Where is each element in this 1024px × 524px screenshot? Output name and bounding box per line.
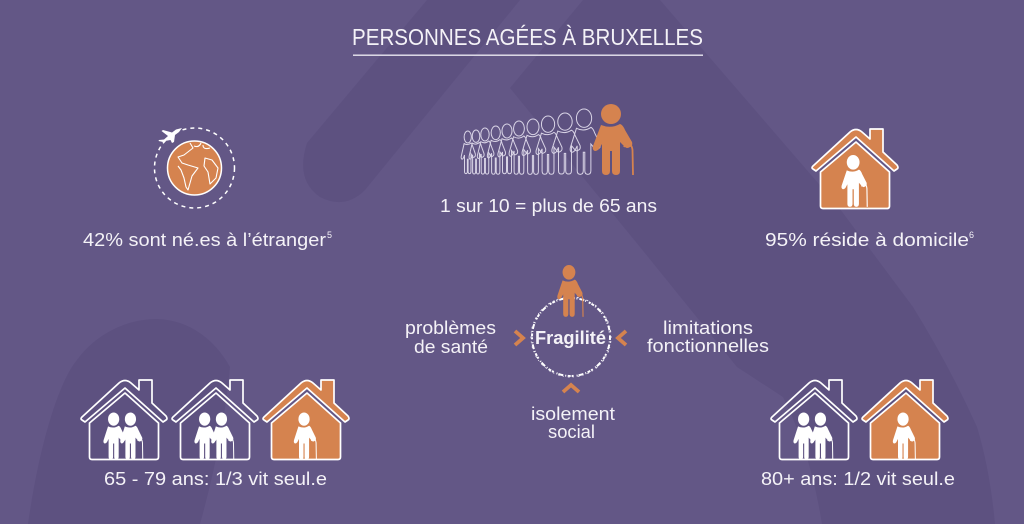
text: health problems: problèmes (405, 318, 496, 338)
text: health problems (405, 318, 496, 357)
title: PERSONNES AGÉES À BRUXELLES (352, 24, 703, 50)
text: health problems: de santé (414, 337, 488, 357)
text: functional limitations (647, 318, 769, 356)
arrow: right chevron (618, 331, 626, 345)
text: born abroad: 5 (327, 230, 332, 240)
text: 80+: 80+ ans: 1/2 vit seul.e (761, 469, 955, 489)
fragility circle: Fragilité (535, 328, 606, 348)
fragility circle (531, 297, 611, 377)
text: at home: 6 (969, 230, 974, 240)
text: functional limitations: limitations (663, 318, 753, 338)
icon: orange house with senior (812, 129, 898, 208)
text: social isolation: isolement (531, 404, 615, 424)
text: 65-79: 65 - 79 ans: 1/3 vit seul.e (104, 469, 327, 489)
text: social isolation (531, 404, 615, 442)
text: born abroad: 42% sont né.es à l’étranger (83, 230, 326, 250)
text: one in ten: 1 sur 10 = plus de 65 ans (440, 196, 657, 216)
icon: orange house single senior 2 (862, 380, 948, 460)
icon: house with couple 2 (172, 380, 258, 460)
icon: orange senior above circle (557, 265, 583, 317)
icon: house with couple 1 (81, 380, 167, 460)
icon: globe with plane (154, 128, 234, 208)
text: social isolation: social (548, 422, 595, 442)
icon: house with couple 3 (771, 380, 857, 460)
icon: orange house single senior (263, 380, 349, 460)
arrow: bottom chevron (563, 385, 579, 392)
text: functional limitations: fonctionnelles (647, 336, 769, 356)
text: at home: 95% réside à domicile (765, 230, 969, 250)
arrow: left chevron (515, 331, 523, 345)
icon: row of ten outlined seniors and one orange senior (461, 104, 633, 175)
